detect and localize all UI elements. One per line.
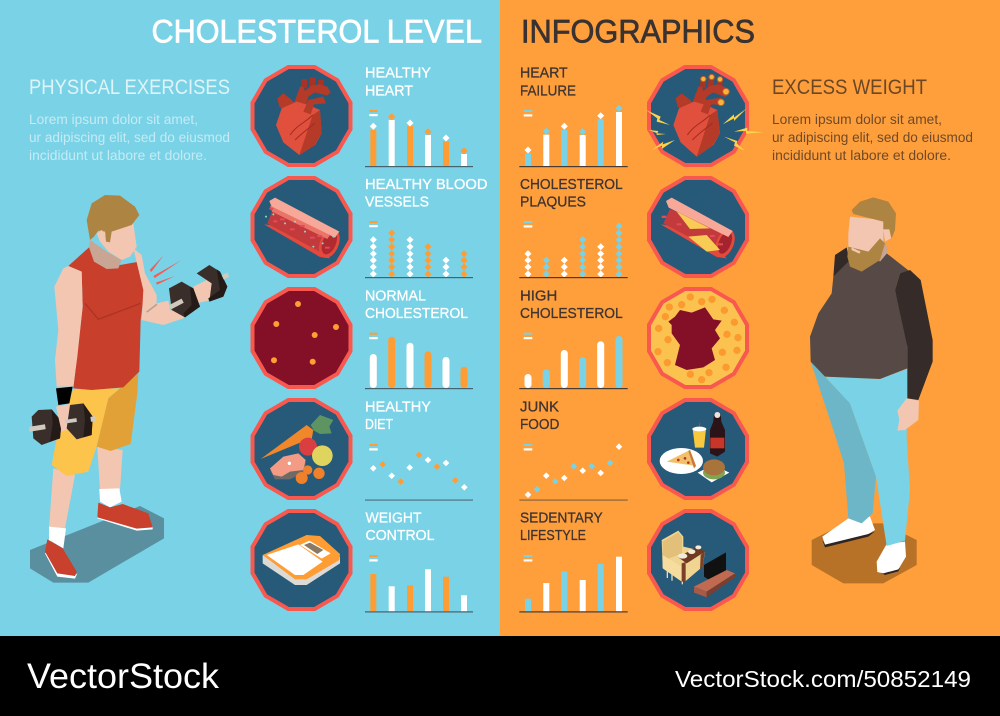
icon: high cholesterol [647, 287, 749, 389]
chart: high cholesterol [519, 288, 628, 389]
label: healthy diet: DIET [365, 416, 393, 433]
label: healthy blood vessels: VESSELS [365, 194, 429, 211]
heading: excess weight: EXCESS WEIGHT [772, 75, 927, 99]
icon: junk food [647, 398, 749, 500]
label: sedentary lifestyle: LIFESTYLE [520, 527, 586, 544]
text block: right lorem: incididunt ut labore et dolore. [772, 148, 951, 163]
chart: sedentary lifestyle [519, 509, 628, 612]
label: healthy blood vessels [365, 176, 488, 211]
text block: right lorem: ur adipiscing elit, sed do eiusmod [772, 130, 973, 145]
label: normal cholesterol: CHOLESTEROL [365, 305, 468, 322]
footer url: vectorstock id: VectorStock.com/50852149 [675, 666, 971, 692]
label: weight control: CONTROL [366, 527, 434, 544]
label: heart failure: FAILURE [520, 83, 576, 100]
label: cholesterol plaques [520, 176, 623, 211]
icon: weight scale [250, 509, 352, 611]
text block: right lorem: Lorem ipsum dolor sit amet, [772, 112, 942, 127]
footer band [0, 636, 1000, 716]
chart: junk food [519, 399, 628, 501]
icon: heart failure [646, 65, 763, 167]
label: healthy diet [365, 399, 431, 433]
label: healthy diet: HEALTHY [365, 399, 431, 416]
text block: left lorem: incididunt ut labore et dolore. [29, 148, 207, 163]
chart: healthy heart [365, 65, 473, 167]
label: heart failure: HEART [520, 65, 568, 82]
label: junk food: JUNK [520, 399, 559, 416]
label: healthy blood vessels: HEALTHY BLOOD [365, 176, 488, 193]
label: high cholesterol: CHOLESTEROL [520, 305, 623, 322]
label: weight control [366, 509, 434, 544]
text block: left lorem: Lorem ipsum dolor sit amet, [29, 112, 198, 127]
text block: left lorem [29, 112, 230, 163]
figure: man exercising with dumbbells [29, 195, 228, 583]
label: high cholesterol: HIGH [520, 288, 557, 305]
label: healthy heart: HEART [365, 83, 413, 100]
label: cholesterol plaques: PLAQUES [520, 194, 586, 211]
icon: healthy diet [250, 398, 352, 500]
chart: weight control [365, 509, 473, 612]
heading: physical exercises: PHYSICAL EXERCISES [29, 75, 230, 99]
label: normal cholesterol [365, 288, 468, 322]
panel: orange background [500, 0, 1000, 636]
text block: right lorem [772, 112, 973, 163]
panel: blue background [0, 0, 500, 636]
title: infographics: INFOGRAPHICS [521, 14, 755, 50]
label: normal cholesterol: NORMAL [365, 288, 426, 305]
label: junk food [520, 399, 559, 433]
label: sedentary lifestyle [520, 509, 603, 544]
label: high cholesterol [520, 288, 623, 322]
icon: sedentary lifestyle [647, 509, 749, 611]
title: cholesterol level: CHOLESTEROL LEVEL [152, 14, 482, 50]
label: heart failure [520, 65, 576, 100]
label: weight control: WEIGHT [366, 509, 422, 526]
label: healthy heart [365, 65, 431, 100]
chart: healthy diet [365, 399, 473, 501]
chart: heart failure [519, 65, 628, 167]
text block: left lorem: ur adipiscing elit, sed do eiusmod [29, 130, 230, 145]
icon: cholesterol plaque vessel [647, 176, 749, 278]
icon: healthy blood vessel [250, 176, 352, 278]
icon: healthy heart [250, 65, 352, 167]
label: cholesterol plaques: CHOLESTEROL [520, 176, 623, 193]
icon: normal cholesterol [250, 287, 352, 389]
label: junk food: FOOD [520, 416, 559, 433]
chart: normal cholesterol [365, 288, 473, 389]
figure: overweight bearded man [810, 197, 933, 583]
chart: healthy blood vessels [365, 176, 488, 278]
footer logo: vectorstock: VectorStock [27, 657, 220, 696]
chart: cholesterol plaques [519, 176, 628, 278]
label: healthy heart: HEALTHY [365, 65, 431, 82]
label: sedentary lifestyle: SEDENTARY [520, 509, 603, 526]
